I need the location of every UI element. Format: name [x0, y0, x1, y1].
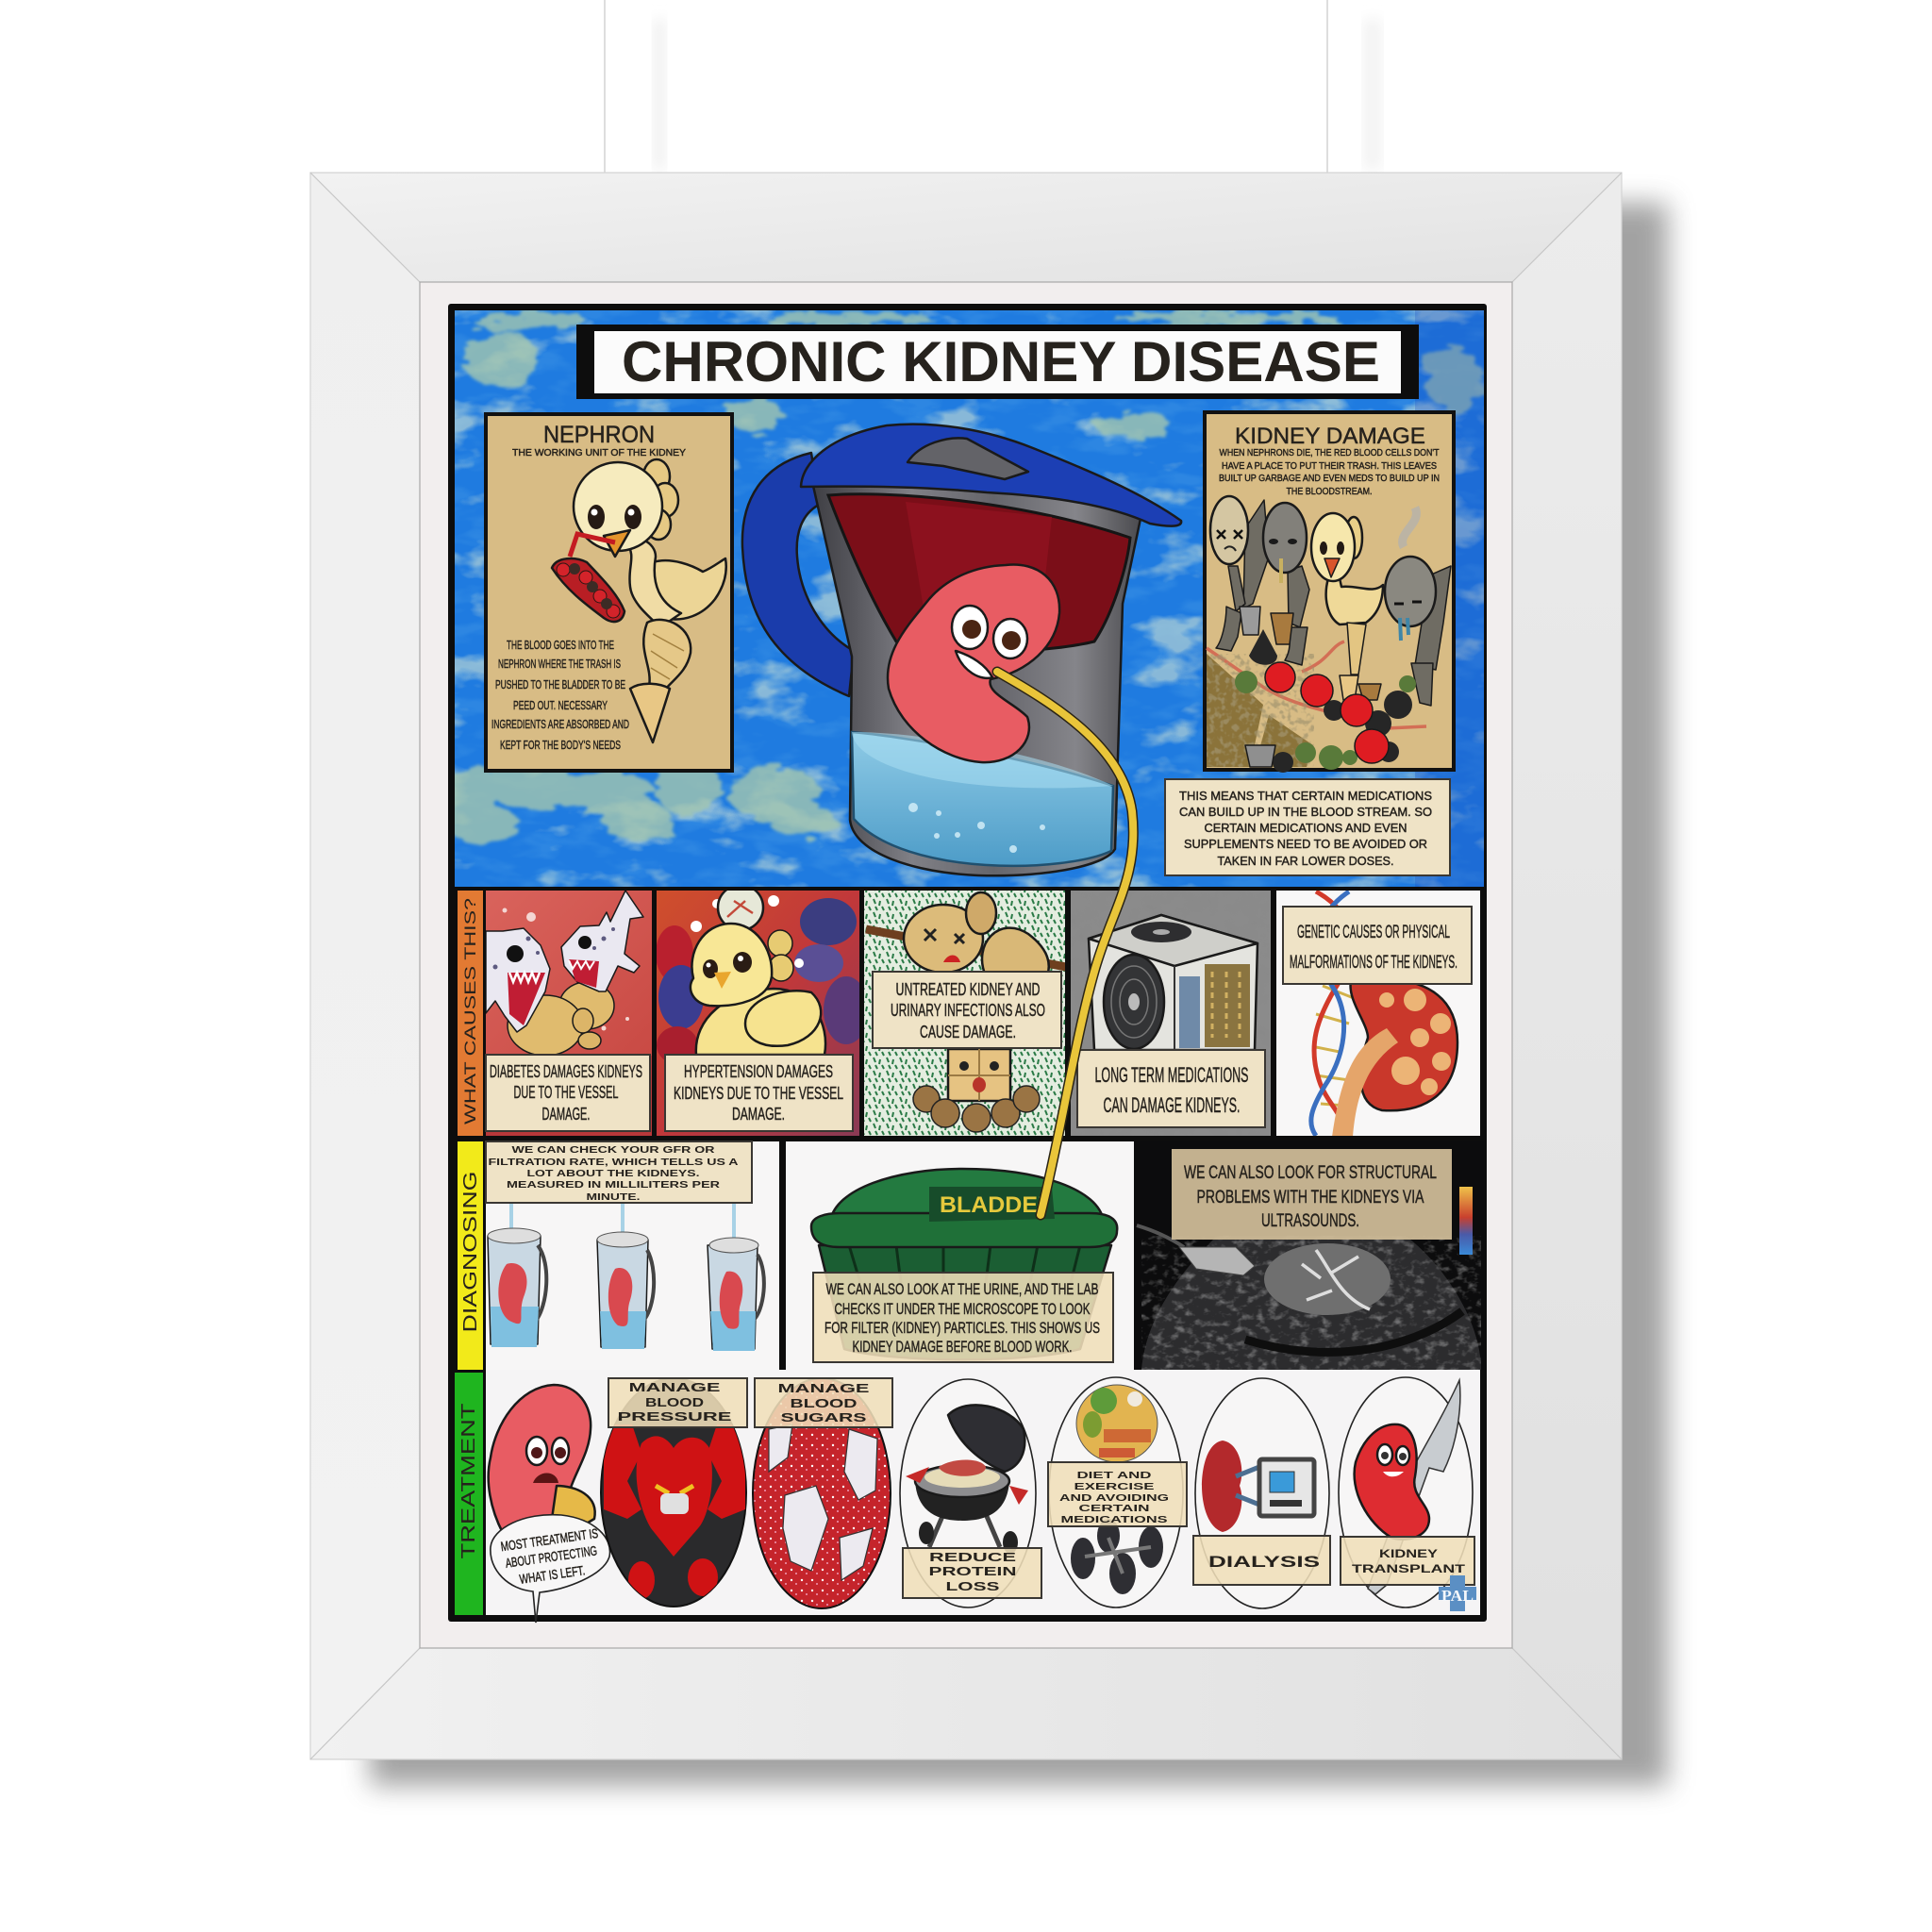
treatment: kidney transplant — [1339, 1377, 1474, 1607]
poster outer border — [448, 304, 1487, 1622]
caption — [1077, 1050, 1265, 1127]
panel: treatment — [455, 1370, 1480, 1623]
caption: CAUSE DAMAGE. — [920, 1023, 1016, 1041]
kidney damage description — [1219, 448, 1440, 497]
side label: diagnosing: DIAGNOSING — [460, 1172, 481, 1332]
caption: WE CAN CHECK YOUR GFR OR — [511, 1144, 715, 1156]
side label: what causes this: WHAT CAUSES THIS? — [461, 898, 479, 1124]
cause: diabetes — [486, 891, 652, 1136]
red stream — [1207, 641, 1426, 728]
nephron description: PEED OUT. NECESSARY — [513, 698, 608, 712]
caption: LOT ABOUT THE KIDNEYS. — [526, 1168, 700, 1179]
caption — [873, 972, 1061, 1048]
caption: MALFORMATIONS OF THE KIDNEYS. — [1290, 953, 1457, 973]
side label: diagnosing — [458, 1141, 483, 1370]
label — [1193, 1536, 1330, 1585]
nephron description: KEPT FOR THE BODY'S NEEDS — [500, 738, 621, 752]
caption — [813, 1273, 1113, 1362]
label — [903, 1548, 1041, 1598]
hanging straps — [605, 0, 1382, 174]
piranhas — [769, 1424, 877, 1580]
label: MANAGE — [628, 1380, 721, 1394]
label: AND AVOIDING — [1059, 1492, 1169, 1504]
colour scale — [1459, 1187, 1473, 1255]
dark red filter funnel — [828, 494, 1130, 653]
caption: CAN DAMAGE KIDNEYS. — [1104, 1093, 1240, 1117]
medications note: THIS MEANS THAT CERTAIN MEDICATIONS — [1179, 789, 1432, 803]
nephron description: INGREDIENTS ARE ABSORBED AND — [491, 717, 629, 731]
sad kidney — [489, 1385, 595, 1533]
grill icon — [906, 1405, 1028, 1554]
label: CERTAIN — [1079, 1503, 1149, 1514]
caption — [486, 1141, 752, 1203]
lid of pitcher — [801, 425, 1181, 526]
caption: MEASURED IN MILLILITERS PER — [507, 1179, 721, 1191]
panel: nephron — [486, 414, 732, 771]
caption: HYPERTENSION DAMAGES — [684, 1062, 833, 1081]
nephron description: PUSHED TO THE BLADDER TO BE — [495, 677, 625, 691]
bladder bin: BLADDER — [940, 1192, 1055, 1218]
caption: DIABETES DAMAGES KIDNEYS — [490, 1062, 642, 1081]
picture frame — [310, 173, 1622, 1759]
treatment: diet and exercise — [1048, 1377, 1187, 1607]
cystic kidney — [1332, 979, 1457, 1137]
muscular heart — [604, 1424, 745, 1599]
caption — [665, 1055, 853, 1131]
kidney damage description: BUILT UP GARBAGE AND EVEN MEDS TO BUILD UP IN — [1219, 474, 1440, 484]
nephron description: NEPHRON WHERE THE TRASH IS — [498, 657, 621, 671]
caption: LONG TERM MEDICATIONS — [1094, 1063, 1249, 1087]
caption: KIDNEYS DUE TO THE VESSEL — [674, 1084, 843, 1103]
label: BLOOD — [645, 1395, 704, 1409]
dna helix — [1311, 891, 1358, 1136]
speech bubble: MOST TREATMENT IS — [500, 1525, 599, 1554]
label: KIDNEY — [1379, 1547, 1438, 1560]
side label: treatment — [455, 1373, 483, 1615]
nephron description — [491, 638, 629, 752]
kidney damage description: WHEN NEPHRONS DIE, THE RED BLOOD CELLS DON'T — [1219, 448, 1440, 458]
caption: GENETIC CAUSES OR PHYSICAL — [1297, 923, 1450, 942]
caption: ULTRASOUNDS. — [1261, 1211, 1359, 1231]
treatment: manage blood sugars — [753, 1378, 892, 1608]
caption — [486, 1055, 650, 1131]
garbage ground — [1207, 654, 1314, 767]
caption: FILTRATION RATE, WHICH TELLS US A — [489, 1157, 739, 1168]
red blood cells and trash bags — [1235, 607, 1416, 773]
water — [852, 732, 1113, 866]
frame drop shadow — [370, 203, 1668, 1786]
caption — [1283, 907, 1472, 984]
food plate — [1076, 1385, 1158, 1462]
treatment: manage blood pressure — [601, 1378, 747, 1607]
diagnostic: filtration rate — [486, 1141, 779, 1370]
label: DIET AND — [1077, 1470, 1152, 1481]
label: TRANSPLANT — [1352, 1562, 1466, 1575]
ultrasound scan — [1141, 1236, 1481, 1370]
caption: WE CAN ALSO LOOK AT THE URINE, AND THE LAB — [826, 1280, 1098, 1298]
label: EXERCISE — [1074, 1481, 1155, 1492]
label: MANAGE — [777, 1381, 870, 1395]
caption: FOR FILTER (KIDNEY) PARTICLES. THIS SHOWS US — [824, 1319, 1100, 1337]
label — [1048, 1462, 1187, 1526]
caption — [1172, 1149, 1452, 1240]
label: DIALYSIS — [1208, 1553, 1320, 1571]
speech bubble: ABOUT PROTECTING — [505, 1542, 598, 1571]
small pitchers — [488, 1228, 764, 1351]
label: LOSS — [945, 1579, 1000, 1593]
caption: CHECKS IT UNDER THE MICROSCOPE TO LOOK — [834, 1300, 1091, 1318]
diagnostic: ultrasound — [1134, 1141, 1484, 1370]
air conditioner unit — [1089, 915, 1257, 1050]
PAL logo: PAL — [1441, 1587, 1474, 1605]
heading: kidney damage: KIDNEY DAMAGE — [1235, 424, 1425, 449]
treatment: reduce protein loss — [900, 1379, 1041, 1607]
diagnostic: urine bladder bin — [786, 1141, 1134, 1370]
medications note — [1165, 779, 1450, 875]
side label: treatment: TREATMENT — [458, 1404, 479, 1558]
heading: nephron: NEPHRON — [543, 422, 655, 448]
label: REDUCE — [929, 1550, 1017, 1564]
urine tube over panels — [997, 672, 1133, 1215]
caption: DUE TO THE VESSEL — [513, 1083, 619, 1102]
dumbbells — [1071, 1519, 1163, 1594]
scalpel — [1368, 1380, 1460, 1594]
bladder bin — [811, 1169, 1117, 1359]
speech bubble: WHAT IS LEFT. — [519, 1562, 586, 1587]
cause: long term medications — [1071, 891, 1271, 1136]
medications note: CERTAIN MEDICATIONS AND EVEN — [1204, 821, 1407, 835]
speech bubble — [491, 1515, 610, 1623]
subheading: working unit: THE WORKING UNIT OF THE KIDNEY — [512, 448, 686, 458]
label: PRESSURE — [617, 1409, 732, 1424]
label: BLOOD — [791, 1396, 857, 1410]
caption: MINUTE. — [587, 1191, 641, 1203]
title: CHRONIC KIDNEY DISEASE — [622, 330, 1380, 393]
side label: what causes this — [458, 891, 483, 1136]
label — [1341, 1537, 1474, 1585]
caption: DAMAGE. — [732, 1105, 785, 1124]
pressure gauge — [717, 891, 764, 928]
panel: diagnosing — [458, 1141, 1484, 1370]
caption: KIDNEY DAMAGE BEFORE BLOOD WORK. — [853, 1338, 1072, 1356]
cause: infections — [864, 891, 1066, 1136]
panel: kidney damage — [1205, 412, 1454, 773]
kidney damage description: THE BLOODSTREAM. — [1287, 487, 1372, 497]
medications note: TAKEN IN FAR LOWER DOSES. — [1217, 854, 1394, 868]
pitcher with kidney — [742, 453, 1141, 875]
label: SUGARS — [781, 1410, 867, 1424]
kidney and machine icon — [1202, 1441, 1314, 1532]
PAL logo — [1439, 1575, 1476, 1611]
label — [608, 1378, 747, 1427]
panel: blue hero — [443, 310, 1484, 887]
caption: UNTREATED KIDNEY AND — [896, 980, 1040, 999]
cause: genetics — [1276, 891, 1480, 1137]
medications note: CAN BUILD UP IN THE BLOOD STREAM. SO — [1179, 805, 1432, 819]
caption: DAMAGE. — [541, 1105, 591, 1124]
treatment: dialysis — [1193, 1378, 1330, 1608]
cause: hypertension — [656, 885, 869, 1136]
caption: PROBLEMS WITH THE KIDNEYS VIA — [1196, 1188, 1424, 1208]
failing nephron characters — [1210, 496, 1451, 706]
nephron duck character — [552, 459, 726, 742]
medications note: SUPPLEMENTS NEED TO BE AVOIDED OR — [1184, 837, 1427, 851]
nephron description: THE BLOOD GOES INTO THE — [507, 638, 614, 652]
ultrasound probe — [1137, 1225, 1255, 1275]
pitcher body — [813, 476, 1141, 875]
happy kidney — [1355, 1424, 1429, 1540]
caption: URINARY INFECTIONS ALSO — [891, 1001, 1045, 1020]
kidney damage description: HAVE A PLACE TO PUT THEIR TRASH. THIS LEAVES — [1222, 461, 1437, 472]
panel: what causes this — [458, 885, 1480, 1137]
label — [755, 1378, 892, 1427]
caption: WE CAN ALSO LOOK FOR STRUCTURAL — [1184, 1163, 1437, 1183]
label: PROTEIN — [928, 1564, 1017, 1578]
kidney character — [888, 564, 1059, 762]
pitcher handle — [742, 453, 854, 696]
label: MEDICATIONS — [1060, 1514, 1168, 1525]
